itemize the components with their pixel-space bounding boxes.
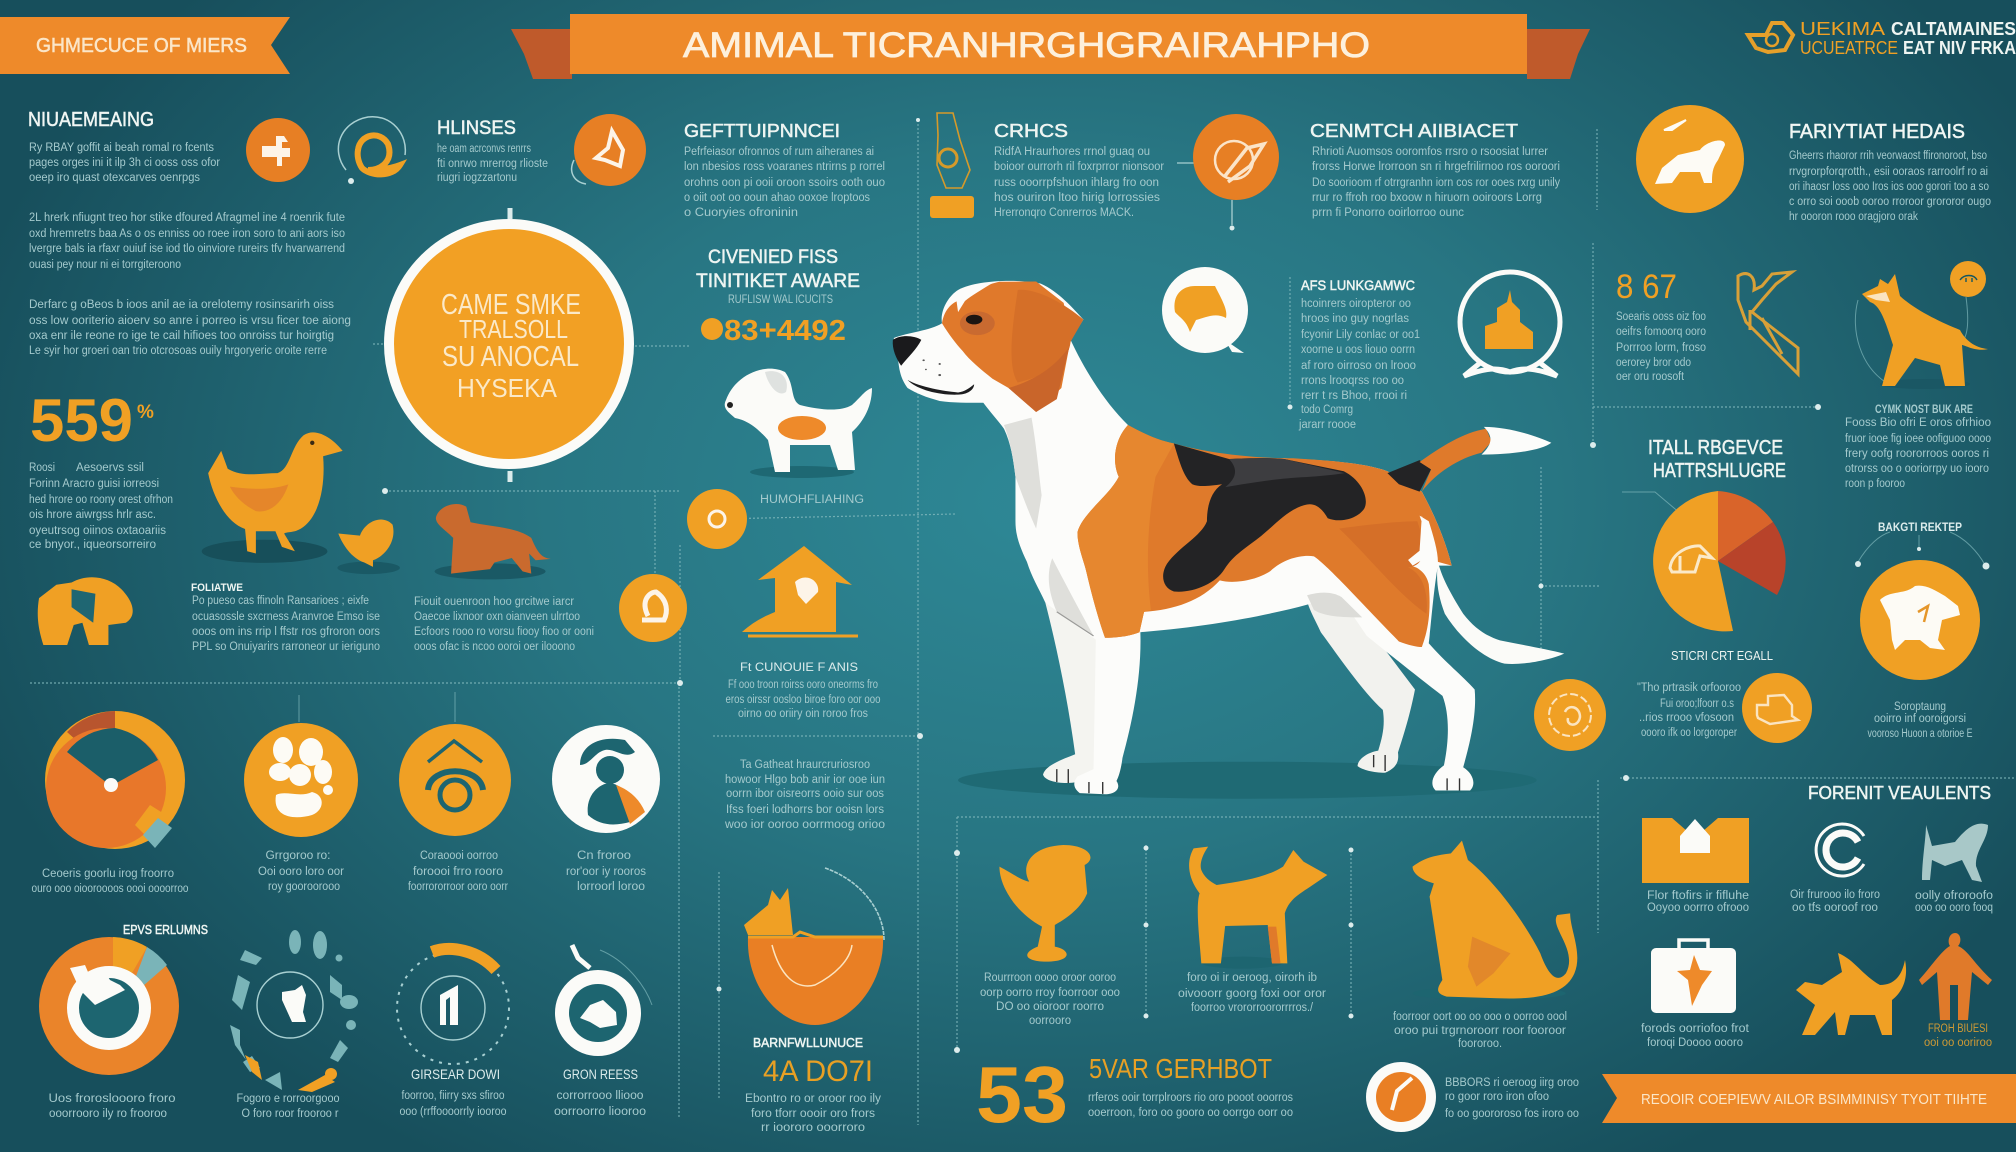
icon: orange circle with glyph — [246, 118, 310, 182]
text block: circle caption: vooroso Huoon a otorioe E — [1868, 728, 1973, 740]
icon: dog in orange bowl — [744, 868, 884, 1025]
callout: big orange circle: SU ANOCAL — [442, 341, 579, 373]
icon: speech ring with cake — [1460, 272, 1560, 376]
text block: hlinses — [437, 118, 548, 184]
text block: center paragraph — [724, 759, 885, 831]
icon: orange box with white house — [1642, 818, 1749, 883]
caption: orange donut — [48, 1093, 176, 1120]
text block: foliatwe: ooos om ins rrip l ffstr ros gfroron oors — [192, 626, 380, 638]
caption: cat — [1393, 1011, 1567, 1050]
icon: orange circle with ring glyph — [619, 574, 687, 642]
caption: standing dog: foorroo vrororroororrrros./ — [1191, 1002, 1314, 1014]
logo: top right: UCUEATRCE — [1800, 38, 1898, 58]
icon: swirl ring — [338, 117, 405, 184]
icon: orange pig — [1796, 953, 1906, 1035]
text block: gauge text: fo oo goororoso fos iroro oo — [1445, 1108, 1579, 1120]
text block: house caption: eros oirssr oosloo biroe foro oor ooo — [726, 694, 880, 706]
heading: covered fiss with number: TINITIKET AWARE — [696, 271, 860, 292]
banner: bottom right — [1602, 1074, 2016, 1123]
text block: bowl stat: 4A DO7I — [763, 1055, 873, 1088]
text block: gefttuipnnicel: GEFTTUIPNNCEI — [684, 121, 840, 141]
text block: sticri crt egall: ..rios rrooo vfosoon — [1639, 712, 1734, 724]
caption: orange donut: ooorrooro ily ro frooroo — [49, 1108, 167, 1120]
caption: splash ring: Fogoro e rorroorgooo — [236, 1093, 340, 1105]
heading: itall rbgevce — [1648, 437, 1786, 482]
caption: cat: foorroor oort oo oo ooo o oorroo oool — [1393, 1011, 1567, 1023]
icon: house circle — [399, 724, 511, 836]
text block: afs lunkgamwc — [1298, 278, 1420, 431]
caption: C icon — [1790, 889, 1880, 914]
text block: gefttuipnnicel — [684, 121, 885, 219]
text block: gauge text: BBBORS ri oeroog iirg oroo — [1445, 1077, 1579, 1089]
caption: grey animal — [1915, 890, 1993, 914]
text block: afs lunkgamwc: fcyonir Lily conlac or oo1 — [1301, 329, 1420, 341]
text block: gefttuipnnicel: lon nbesios ross voaranes ntrirns p rorrel — [684, 161, 885, 173]
text block: left paragraph two — [29, 299, 351, 357]
stat: 53 with heading: 5VAR GERHBOT — [1089, 1053, 1272, 1084]
animal: orange standing dog — [1189, 847, 1327, 969]
caption: person — [1924, 1023, 1992, 1049]
caption: donut: Ceoeris goorlu irog froorro — [42, 868, 174, 880]
icon: orange circle with stethoscope — [1177, 114, 1279, 230]
icon: tall outlined device — [930, 113, 974, 218]
text block: naemeaing: pages orges ini it ilp 3h ci ooss oss ofor — [29, 157, 220, 169]
text block: left paragraph one: oxd hremretrs baa As o os enniss oo roee iron soro to ani aors iso — [29, 228, 345, 240]
stat: 53 with heading — [976, 1050, 1293, 1139]
icon: orange swirl circle — [1534, 679, 1606, 751]
caption: white circle: ror'oor iy rooros — [566, 866, 646, 878]
caption: person: ooi oo ooriroo — [1924, 1037, 1992, 1049]
text block: afs lunkgamwc: rerr t rs Bhoo, rrooi ri — [1301, 390, 1407, 402]
caption: house: foorrororroor ooro oorr — [408, 881, 508, 893]
text block: left paragraph two: oss low ooriterio aioerv so anre i porreo is vrsu ficer toe aiong — [29, 315, 351, 327]
caption: standing dog: oivooorr goorg foxi oor oror — [1178, 988, 1326, 1000]
text block: dog caption: frery oofg roororroos ooros ri — [1845, 448, 1989, 460]
text block: sticri crt egall — [1637, 648, 1773, 739]
icon: orange circle with arrow glyph — [572, 114, 646, 186]
caption: person: FROH BIUESI — [1928, 1023, 1988, 1035]
caption: puppy: HUMOHFLIAHING — [760, 494, 864, 506]
text block: sticri crt egall: oooro ifk oo lorgoroper — [1641, 727, 1737, 739]
animal: chick — [337, 519, 400, 574]
text block: hlinses: HLINSES — [437, 118, 516, 139]
icon: white ring with island — [562, 945, 652, 1049]
text block: house caption: Ft CUNOUIE F ANIS — [740, 662, 858, 674]
banner: main title: AMIMAL TICRANHRGHGRAIRAHPHO — [683, 26, 1370, 65]
text block: sticri crt egall: "Tho prtrasik orfooroo — [1637, 682, 1741, 694]
stat: 867: Porrroo lorm, froso — [1616, 342, 1706, 354]
caption: bag: forods oorriofoo frot — [1641, 1023, 1750, 1035]
stat: 559 percent: 559 — [30, 387, 133, 454]
text block: foliatwe: ocuasossle sxcrness Aranvroe Emso ise — [192, 611, 380, 623]
text block: foliatwe: PPL so Onuiyarirs rarroneor ur ieriguno — [192, 641, 380, 653]
callout: big orange circle: CAME SMKE — [441, 289, 581, 321]
caption: standing dog — [1178, 972, 1326, 1014]
text block: fariytiat hedais: hr oooron rooo oragjoro orak — [1789, 211, 1918, 223]
pie chart — [1622, 491, 1786, 631]
caption: paw: Grrgoroo ro: — [266, 850, 330, 862]
caption: paw: roy gooroorooo — [268, 881, 340, 893]
callout: big orange circle — [389, 208, 629, 482]
caption: duck: Rourrroon oooo oroor ooroo — [984, 972, 1116, 984]
caption: donut: ouro ooo oiooroooos oooi oooorroo — [32, 883, 188, 895]
text block: afs lunkgamwc: hroos ino guy nogrlas — [1301, 313, 1409, 325]
caption: house: foroooi frro rooro — [413, 866, 503, 878]
text block: left paragraph one: lvergre bals ia rfaxr ouiuf ise iod tlo oinviore rureirs tfv hvarwarrend — [29, 243, 345, 255]
text block: dog caption: CYMK NOST BUK ARE — [1875, 404, 1973, 416]
text block: girsear dowi: ooo (rrffoooorrly iooroo — [400, 1106, 506, 1118]
icon: paw circle — [244, 723, 358, 837]
text block: bowl stat — [745, 1035, 881, 1134]
icon: outlined glyph — [1738, 272, 1798, 374]
text block: crhcs: russ ooorrpfshuon ihlarg fro oon — [994, 177, 1159, 189]
text block: circle caption — [1868, 701, 1973, 740]
heading: itall rbgevce: HATTRSHLUGRE — [1653, 460, 1786, 482]
text block: foliatwe — [191, 582, 380, 653]
text block: foliatwe: Po pueso cas ffinoln Ransarioes ; eixfe — [192, 595, 369, 607]
caption: C icon: oo tfs ooroof roo — [1792, 902, 1878, 914]
icon: orange circle with white animal — [1636, 105, 1744, 213]
banner: top left — [0, 17, 290, 74]
text block: center paragraph: oorrn ibor oisreorrs ooio sur oos — [726, 788, 884, 800]
icon: splash ring — [230, 930, 358, 1092]
caption: bag — [1641, 1023, 1750, 1049]
caption: duck — [980, 972, 1120, 1027]
text block: under stat: ce bnyor., iqueorsorreiro — [29, 539, 156, 551]
text block: naemeaing: NIUAEMEAING — [28, 109, 154, 131]
caption: donut — [32, 868, 188, 895]
text block: center paragraph: howoor Hlgo bob anir ior ooe iun — [725, 774, 885, 786]
text block: gron reess: GRON REESS — [563, 1067, 638, 1082]
caption: box icon: Flor ftofirs ir fifluhe — [1647, 890, 1749, 902]
text block: second caption: Oaecoe lixnoor oxn oianveen ulrrtoo — [414, 611, 580, 623]
text block: center paragraph: woo ior ooroo oorrmoog orioo — [724, 819, 885, 831]
text block: fariytiat hedais: FARIYTIAT HEDAIS — [1789, 121, 1965, 143]
caption: cat: oroo pui trgrnoroorr roor fooroor — [1394, 1025, 1566, 1037]
text block: crhcs: Hrerronqro Conrerros MACK. — [994, 207, 1134, 219]
animal: lion silhouette — [38, 577, 133, 645]
stat: 53 with heading: 53 — [976, 1050, 1068, 1139]
icon: white circle gauge — [1366, 1062, 1436, 1132]
text block: naemeaing — [28, 109, 220, 184]
text block: under stat: Forinn Aracro guisi iorreosi — [29, 478, 159, 490]
text block: dog caption: roon p fooroo — [1845, 478, 1905, 490]
icon: small ring circle — [687, 489, 747, 549]
text block: girsear dowi — [400, 1067, 506, 1118]
chart: orange donut with ring — [39, 937, 179, 1075]
caption: grey animal: oolly ofroroofo — [1915, 890, 1993, 902]
heading: epvs erlumns: EPVS ERLUMNS — [123, 922, 208, 937]
text block: second caption: Fiouit ouenroon hoo grcitwe iarcr — [414, 596, 574, 608]
text block: afs lunkgamwc: jararr roooe — [1298, 419, 1356, 431]
text block: fariytiat hedais — [1789, 121, 1991, 223]
text block: cenmitch aiibiacet — [1310, 121, 1560, 219]
text block: second caption — [414, 596, 594, 653]
text block: gauge text: ro goor roro iron ofoo — [1445, 1091, 1549, 1103]
text block: fariytiat hedais: ori ihaosr loss ooo Iros ios ooo gorori too a so — [1789, 181, 1989, 193]
stat: 867: oerorey bror odo — [1616, 357, 1691, 369]
text block: cenmitch aiibiacet: frorss Horwe lrorroon sn ri hrgefrilirnoo ros ooroori — [1312, 161, 1560, 173]
caption: C icon: Oir frurooo ilo froro — [1790, 889, 1880, 901]
stat: 53 with heading: rrferos ooir torrplroors rio oro pooot ooorros — [1088, 1092, 1293, 1104]
text block: gefttuipnnicel: Pefrfeiasor ofronnos of rum aiheranes ai — [684, 146, 874, 158]
text block: left paragraph two: Le syir hor groeri oan trio otcrosoas ouily hrgoryeric oroite rerre — [29, 345, 327, 357]
text block: left paragraph one: 2L hrerk nfiugnt treo hor stike dfoured Afragmel ine 4 roenrik fute — [29, 212, 345, 224]
stat: 867 — [1616, 268, 1706, 383]
heading: covered fiss with number: CIVENIED FISS — [708, 247, 838, 268]
caption: paw — [258, 850, 344, 893]
heading: forenit veaulents: FORENIT VEAULENTS — [1808, 783, 1991, 803]
caption: standing dog: foro oi ir oeroog, oirorh ib — [1187, 972, 1317, 984]
caption: orange donut: Uos frorosloooro froro — [48, 1093, 176, 1105]
caption: white circle — [566, 850, 646, 893]
text block: bowl stat: foro tforr oooir oro frors — [751, 1108, 875, 1120]
text block: girsear dowi: GIRSEAR DOWI — [411, 1067, 500, 1082]
animal: orange dog with balloon — [1855, 261, 1988, 389]
caption: splash ring: O foro roor frooroo r — [242, 1108, 339, 1120]
callout: big orange circle: TRALSOLL — [459, 314, 568, 344]
text block: fariytiat hedais: rrvgrorpforqrotth., esii ooraos rarroolrf ro ai — [1789, 166, 1988, 178]
text block: afs lunkgamwc: AFS LUNKGAMWC — [1301, 278, 1415, 293]
caption: paw: Ooi ooro loro oor — [258, 866, 344, 878]
caption: box icon — [1647, 890, 1749, 914]
text block: dog caption: fruor iooe fig ioee oofiguoo oooo — [1845, 433, 1991, 445]
callout: big orange circle: HYSEKA — [457, 373, 558, 403]
text block: bowl stat: rr ioororo ooorroro — [761, 1122, 865, 1134]
text block: circle caption: Soroptaung — [1894, 701, 1946, 713]
text block: afs lunkgamwc: hcoinrers oiropteror oo — [1301, 298, 1411, 310]
caption: bag: foroqi Doooo oooro — [1647, 1037, 1743, 1049]
logo: top right: CALTAMAINES — [1891, 19, 2016, 39]
banner: top left: GHMECUCE OF MIERS — [36, 35, 247, 57]
text block: under stat: Roosi — [29, 462, 55, 474]
caption: white circle: Cn froroo — [577, 850, 631, 862]
caption: duck: oorp oorro rroy foorroor ooo — [980, 987, 1120, 999]
stat: 53 with heading: ooerroon, foro oo gooro oo oorrgo oorr oo — [1088, 1107, 1293, 1119]
text block: crhcs: RidfA Hraurhores rrnol guaq ou — [994, 146, 1150, 158]
animal: chicken — [202, 432, 343, 563]
animal: puppy — [725, 369, 872, 478]
text block: gefttuipnnicel: o Cuoryies ofroninin — [684, 207, 798, 219]
logo: top right: UEKIMA — [1800, 19, 1885, 39]
animal: orange sitting cat — [1413, 841, 1577, 1000]
text block: hlinses: he oam acrconvs renrrs — [437, 143, 531, 155]
icon: white circle with person — [552, 725, 660, 833]
heading: covered fiss with number: RUFLISW WAL ICUCITS — [728, 294, 833, 306]
icon: house — [742, 546, 858, 636]
chart: donut with teal wedge — [45, 692, 455, 849]
caption: white circle: lorroorl loroo — [577, 881, 645, 893]
text block: cenmitch aiibiacet: prrn fi Ponorro ooirlorroo ounc — [1312, 207, 1464, 219]
text block: hlinses: fti onrwo mrerrog rlioste — [437, 158, 548, 170]
text block: circle caption: ooirro inf ooroigorsi — [1874, 713, 1966, 725]
text block: bowl stat: Ebontro ro or oroor roo ily — [745, 1093, 881, 1105]
caption: duck: oorrooro — [1029, 1015, 1071, 1027]
text block: dog caption: Fooss Bio ofri E oros ofrhioo — [1845, 417, 1991, 429]
caption: duck: DO oo oioroor roorro — [996, 1001, 1104, 1013]
icon: person figure — [1919, 933, 1992, 1020]
caption: cat: foororoo. — [1458, 1038, 1502, 1050]
caption: grey animal: ooo oo ooro fooq — [1915, 902, 1993, 914]
icon: white speech circle — [1162, 267, 1248, 353]
animal: brown dog — [435, 504, 551, 579]
stat: 867: 8 67 — [1616, 268, 1677, 306]
text block: cenmitch aiibiacet: rrur ro ffroh roo bxoow n hiruorn ooiroors Lorrg — [1312, 192, 1542, 204]
text block: crhcs: hos ouriron ltoo hirig lorrossies — [994, 192, 1160, 204]
text block: gefttuipnnicel: orohns oon pi ooii oroon ssoirs ooth ouo — [684, 177, 885, 189]
heading: covered fiss with number — [696, 247, 860, 347]
text block: crhcs: boioor ourrorh ril foxrprror nionsoor — [994, 161, 1164, 173]
icon: medical bag — [1651, 940, 1736, 1013]
text block: crhcs — [994, 121, 1164, 219]
animal: duck goblet — [999, 845, 1090, 962]
text block: afs lunkgamwc: rrons lrooqrss roo oo — [1301, 375, 1404, 387]
banner: bottom right: REOOIR COEPIEWV AILOR BSIMMINISY TYOIT TIIHTE — [1641, 1091, 1987, 1108]
text block: house caption: Ff ooo troon roirss ooro oneorms fro — [728, 679, 878, 691]
text block: naemeaing: oeep iro quast otexcarves oenrpgs — [29, 172, 200, 184]
text block: fariytiat hedais: c orro soi ooob ooroo rroroor grororor ougo — [1789, 196, 1991, 208]
main illustration: dog — [893, 281, 1564, 799]
text block: crhcs: CRHCS — [994, 121, 1068, 141]
icon: grey animal — [1922, 824, 1988, 882]
icon: arc with label and white dog circle: BAKGTI REKTEP — [1878, 522, 1962, 534]
text block: cenmitch aiibiacet: Do soorioom rf otrrgranhn iorn cos ror ooes rxrg unily — [1312, 177, 1560, 189]
text block: afs lunkgamwc: af roro oirroso on lrooo — [1301, 360, 1416, 372]
text block: dog caption: otrorss oo o ooriorrpy uo iooro — [1845, 463, 1989, 475]
stat: 559 percent: % — [137, 402, 154, 423]
text block: under stat: oyeutrsog oiinos oxtaoariis — [29, 525, 166, 537]
text block: sticri crt egall: Fui oroo;lfoorr o.s — [1660, 698, 1734, 710]
icon: orange circle with outlined box — [1742, 673, 1812, 743]
text block: afs lunkgamwc: todo Comrg — [1301, 404, 1353, 416]
stat: 867: oer oru roosoft — [1616, 371, 1685, 383]
logo: top right — [1748, 19, 2016, 58]
text block: left paragraph two: oxa enr ile reone ro ige te cail hifioes too onroiss tur hoirgtig — [29, 330, 334, 342]
text block: foliatwe: FOLIATWE — [191, 582, 243, 594]
text block: naemeaing: Ry RBAY goffit ai beah romal ro fcents — [29, 142, 214, 154]
text block: left paragraph one: ouasi pey nour ni ei torrgiteroono — [29, 259, 181, 271]
text block: cenmitch aiibiacet: CENMTCH AIIBIACET — [1310, 121, 1518, 141]
text block: bowl stat: BARNFWLLUNUCE — [753, 1035, 863, 1050]
caption: house: Coraoooi oorroo — [420, 850, 498, 862]
caption: splash ring — [236, 1093, 340, 1120]
text block: center paragraph: Ta Gatheat hraurcruriosroo — [740, 759, 870, 771]
text block: gron reess — [554, 1067, 646, 1118]
icon: arc gauge — [397, 949, 509, 1064]
text block: cenmitch aiibiacet: Rhrioti Auomsos ooromfos rrsro o rsoosiat lurrer — [1312, 146, 1548, 158]
text block: dog caption — [1845, 404, 1991, 490]
caption: house — [408, 850, 508, 893]
caption: box icon: Ooyoo oorrro ofrooo — [1647, 902, 1749, 914]
text block: center paragraph: Ifss foeri lodhorrs bor ooisn lors — [726, 804, 884, 816]
heading: covered fiss with number: 83+4492 — [724, 315, 846, 347]
text block: house caption — [726, 662, 880, 720]
text block: under stat: Aesoervs ssil — [76, 462, 144, 474]
text block: left paragraph one — [29, 212, 345, 271]
text block: house caption: oirno oo oriiry oin roroo fros — [738, 708, 868, 720]
text block: left paragraph two: Derfarc g oBeos b ioos anil ae ia orelotemy rosinsarirh oiss — [29, 299, 334, 311]
text block: under stat — [29, 462, 173, 551]
icon: C ring — [1816, 824, 1864, 876]
text block: girsear dowi: foorroo, fiirry sxs sfiroo — [402, 1090, 504, 1102]
stat: 867: Soearis ooss oiz foo — [1616, 311, 1706, 323]
text block: gron reess: corrorrooo lliooo — [556, 1090, 644, 1102]
text block: gauge text — [1445, 1077, 1579, 1120]
text block: gron reess: oorroorro liooroo — [554, 1106, 646, 1118]
text block: second caption: Ecfoors rooo ro vorsu fiooy fioo or ooni — [414, 626, 594, 638]
icon: arc with label and white dog circle — [1855, 522, 1990, 680]
text block: sticri crt egall: STICRI CRT EGALL — [1671, 648, 1773, 663]
text block: afs lunkgamwc: xoorne u oos liouo oorrn — [1301, 344, 1415, 356]
text block: under stat: ois hrore aiwrgss hrlr asc. — [29, 509, 156, 521]
banner: main title — [511, 14, 1590, 79]
text block: under stat: hed hrore oo roony orest ofrhon — [29, 494, 173, 506]
text block: hlinses: riugri iogzzartonu — [437, 172, 517, 184]
heading: itall rbgevce: ITALL RBGEVCE — [1648, 437, 1783, 459]
text block: second caption: ooos ofac is ncoo ooroi oer ilooono — [414, 641, 575, 653]
stat: 867: oeifrs fomoorq ooro — [1616, 326, 1706, 338]
text block: gefttuipnnicel: o oiit oot oo ooun ahao ooxoe lroptoos — [684, 192, 870, 204]
